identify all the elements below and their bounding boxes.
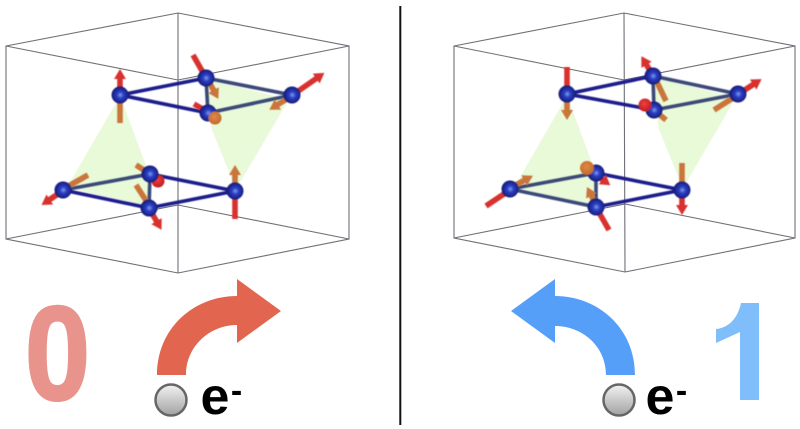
spin arrows, left <box>49 55 317 222</box>
bonds, left <box>63 78 292 208</box>
wireframe cube, left <box>6 13 349 273</box>
atoms, right <box>502 68 746 216</box>
divider <box>399 6 401 425</box>
electron label, right: - <box>676 372 687 410</box>
electron label, left: - <box>231 372 242 410</box>
atoms, left <box>54 70 300 216</box>
wireframe cube, right <box>454 13 795 272</box>
electron icon, left <box>156 384 186 416</box>
bonds, right <box>510 76 738 207</box>
green tetrahedra, left <box>68 80 288 206</box>
curved arrow: blue, left-pointing <box>511 279 635 375</box>
electron label, right: e <box>646 368 674 426</box>
digit 1 <box>716 303 759 400</box>
curved arrow: red, right-pointing <box>157 279 281 375</box>
panel: state 1 crystal structure <box>454 13 795 272</box>
panel: state 0 crystal structure <box>6 13 349 273</box>
spin arrows, right <box>486 64 754 230</box>
electron icon, right <box>604 384 634 416</box>
digit 1: 1 <box>710 277 786 429</box>
digit 0: 0 <box>25 278 90 428</box>
green tetrahedra, right <box>515 78 735 205</box>
electron label, left: e <box>200 368 229 426</box>
